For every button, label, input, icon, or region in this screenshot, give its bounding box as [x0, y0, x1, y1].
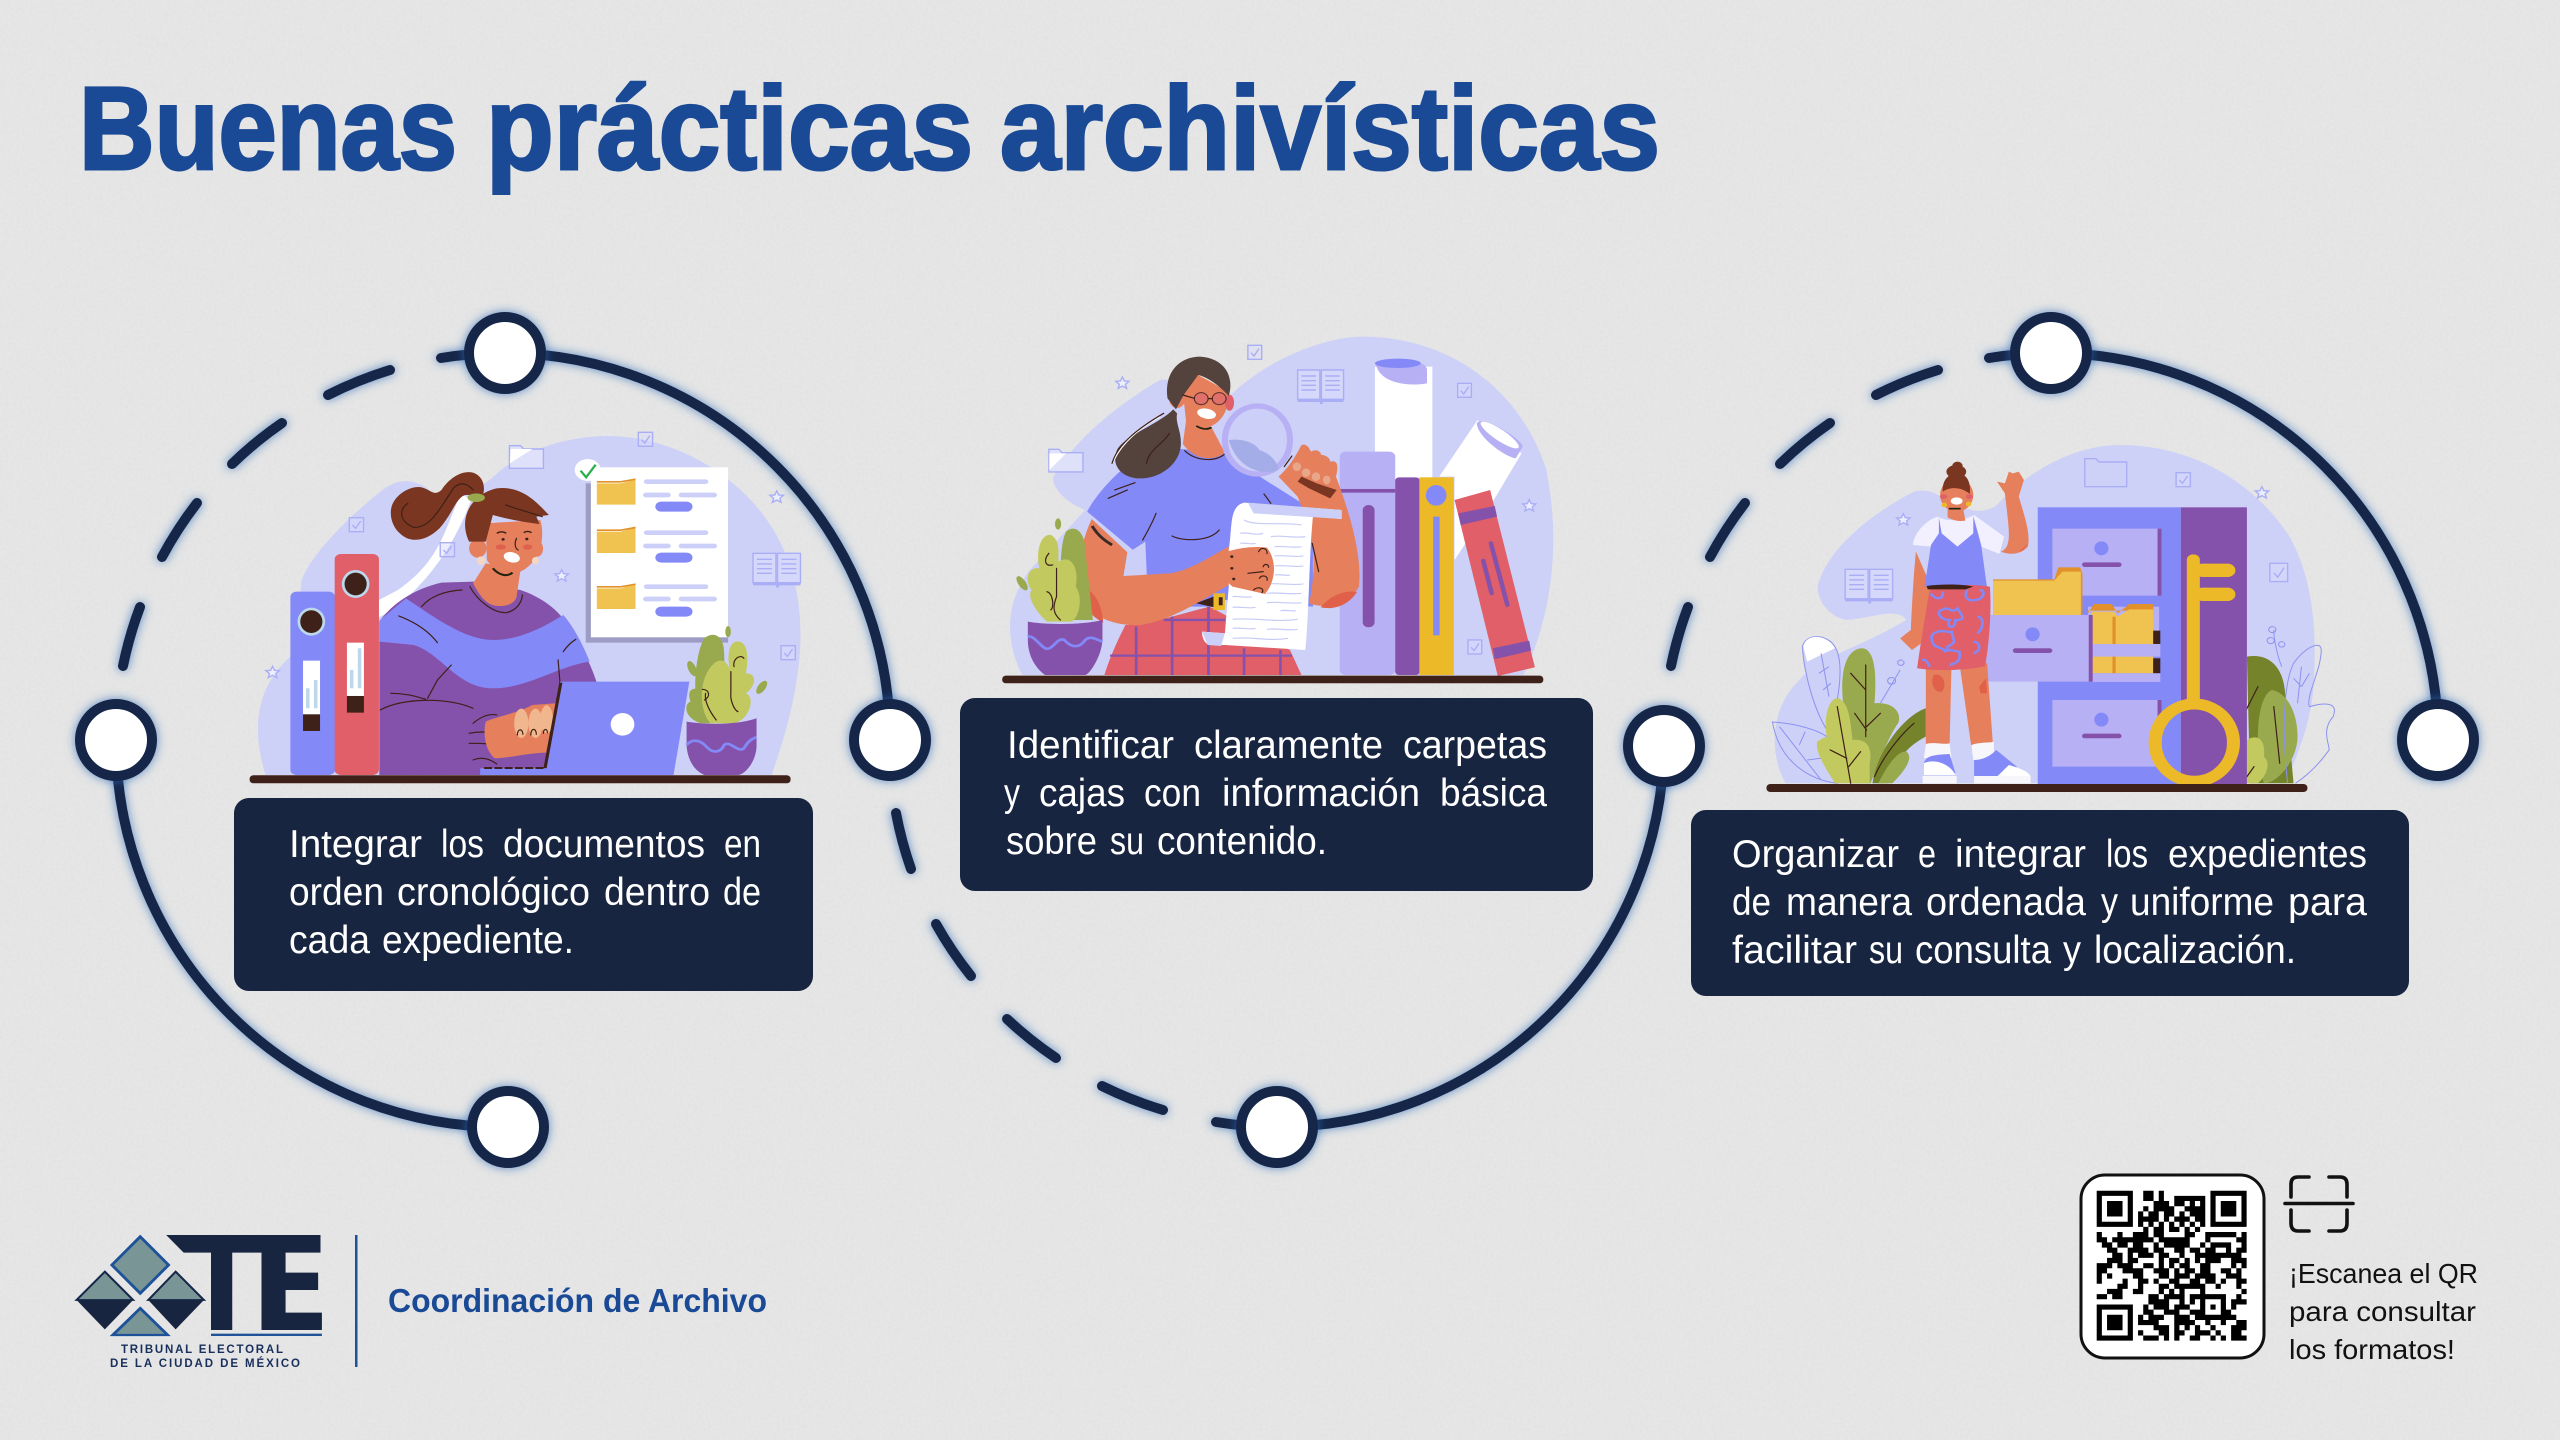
text box 2: con: [1144, 772, 1201, 815]
text box 3: Organizar: [1732, 833, 1899, 876]
icons: small decorative folder, checks, stars and book: [1049, 345, 1536, 654]
QR caption: ¡Escanea el QR: [2289, 1258, 2478, 1289]
text box 1: expediente.: [382, 919, 574, 962]
icon: scan frame: [2285, 1177, 2353, 1231]
text box 3: uniforme: [2130, 881, 2274, 924]
text box 3: y: [2101, 881, 2118, 924]
title: [79, 63, 1660, 195]
QR caption: los formatos!: [2289, 1334, 2455, 1365]
right ring solid arc: [2051, 353, 2438, 740]
text box 2: carpetas: [1403, 724, 1547, 767]
ring nodes: [80, 317, 2474, 1163]
title: prácticas: [486, 63, 973, 195]
text box 3: integrar: [1955, 833, 2086, 876]
text box 1: cronológico: [397, 871, 590, 914]
shelf: [250, 775, 791, 783]
text box 2: [960, 698, 1593, 891]
QR caption: [2289, 1258, 2478, 1365]
text box 3: para: [2288, 881, 2367, 924]
middle ring dashes: [896, 813, 1277, 1127]
left ring dashes: [123, 353, 505, 666]
document board with folders: [575, 459, 728, 643]
text box 2: información: [1222, 772, 1420, 815]
logo: Tribunal Electoral: [77, 1235, 322, 1370]
connecting rings: [116, 353, 2438, 1127]
binders: [290, 554, 379, 775]
standing woman: [1900, 462, 2031, 783]
text box 2: contenido.: [1157, 820, 1327, 863]
divider: [355, 1235, 358, 1367]
illustration: woman beside filing cabinet with key: [1766, 445, 2334, 792]
text box 3: localización.: [2094, 929, 2296, 972]
paper rolls: [1375, 359, 1523, 560]
text box 2: claramente: [1194, 724, 1383, 767]
text box 1: orden: [289, 871, 384, 914]
text box 3: los: [2106, 833, 2148, 876]
books: [1340, 452, 1535, 676]
potted plant: [685, 626, 769, 775]
text box 1: documentos: [503, 823, 705, 866]
scroll: [1202, 503, 1342, 650]
text box 3: y: [2063, 929, 2081, 972]
QR code: [2081, 1175, 2264, 1358]
left ring solid arcs: [116, 353, 890, 1127]
text box 2: Identificar: [1007, 724, 1174, 767]
text box 1: [234, 798, 813, 991]
text box 3: facilitar: [1732, 929, 1857, 972]
text box 3: de: [1732, 881, 1771, 924]
icons: small decorative folder, checks, stars and book: [266, 432, 800, 678]
text box 1: dentro: [604, 871, 710, 914]
right plants: [2246, 645, 2334, 783]
text box 2: cajas: [1039, 772, 1125, 815]
shelf: [1766, 784, 2307, 792]
text box 1: cada: [289, 919, 370, 962]
text box 2: su: [1110, 820, 1144, 863]
text box 3: ordenada: [1926, 881, 2086, 924]
text box 2: sobre: [1006, 820, 1097, 863]
text box 3: consulta: [1915, 929, 2051, 972]
text box 3: [1691, 810, 2409, 996]
text box 3: e: [1918, 833, 1936, 876]
QR caption: para consultar: [2289, 1296, 2476, 1327]
illustration: woman with magnifier, scroll and books: [1002, 337, 1553, 683]
illustration: woman at laptop with binders: [250, 432, 800, 783]
left plants: [1772, 637, 1926, 783]
woman: [379, 472, 596, 775]
text box 3: expedientes: [2168, 833, 2367, 876]
text box 2: y: [1004, 772, 1020, 815]
laptop: [480, 682, 689, 775]
filing cabinet: [2038, 507, 2247, 785]
text box 3: su: [1869, 929, 1903, 972]
text box 2: básica: [1440, 772, 1547, 815]
department name: Coordinación de Archivo: [388, 1282, 767, 1319]
text box 1: los: [441, 823, 484, 866]
icons: small decorative folder, checks, stars and book: [1845, 459, 2288, 703]
woman with magnifier: [1076, 357, 1359, 675]
text box 1: de: [723, 871, 761, 914]
text box 3: manera: [1786, 881, 1912, 924]
text box 1: Integrar: [289, 823, 422, 866]
potted plant: [1014, 518, 1102, 675]
text box 1: en: [724, 823, 761, 866]
hand and magnifier: [1225, 406, 1343, 507]
middle ring solid arc: [1277, 746, 1664, 1127]
title: archivísticas: [1000, 63, 1660, 195]
open drawer with folders: [1984, 567, 2160, 682]
key: [2155, 554, 2235, 781]
title: Buenas: [79, 63, 457, 195]
logo: Tribunal Electoral: DE LA CIUDAD DE MÉXICO: [110, 1357, 300, 1370]
logo: Tribunal Electoral: TRIBUNAL ELECTORAL: [121, 1344, 283, 1356]
shelf: [1002, 676, 1543, 683]
right ring dashes: [1671, 353, 2051, 666]
